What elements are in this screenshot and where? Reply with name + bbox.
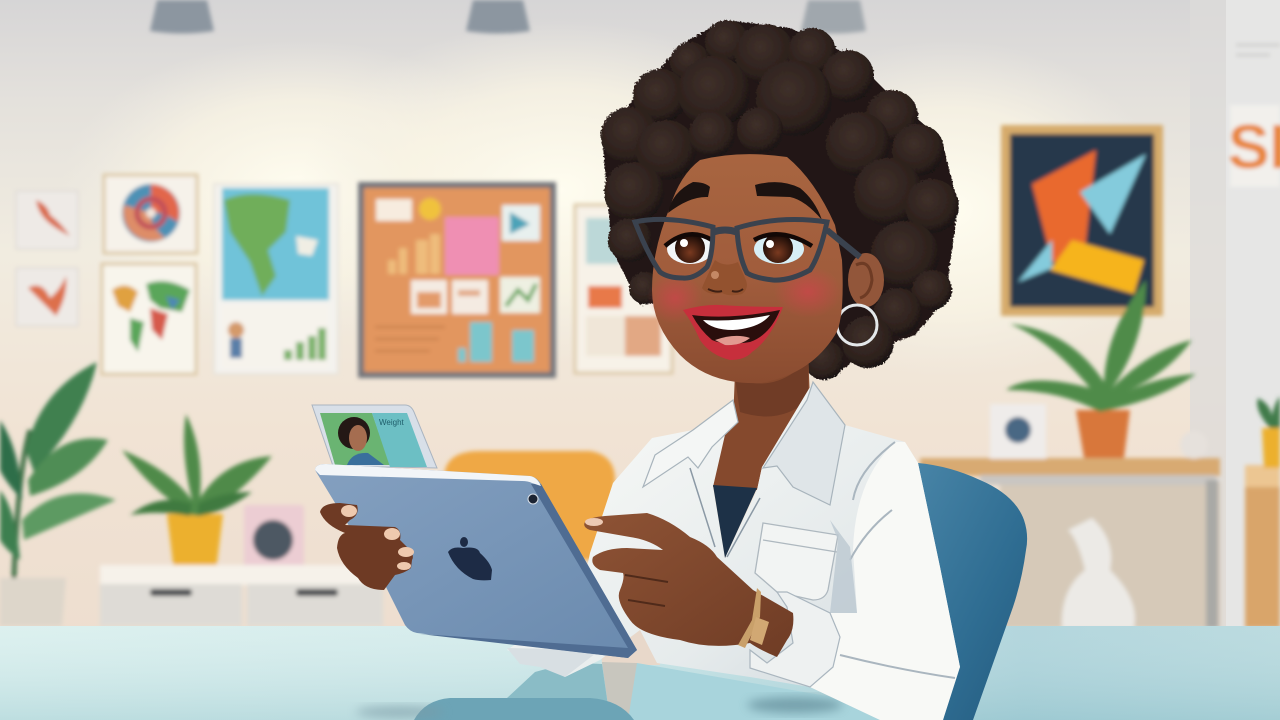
right wooden shelf	[1245, 396, 1280, 628]
upper sleeve highlight	[810, 442, 960, 720]
pocket flap	[763, 540, 837, 552]
right sleeve cuff	[750, 592, 840, 687]
small card behind tablet: Weight	[379, 418, 405, 427]
eyebrow right	[755, 182, 822, 220]
poster: small red marks bottom	[16, 268, 78, 326]
blush right	[774, 266, 842, 318]
ceiling lamps	[150, 0, 866, 34]
earring	[837, 305, 877, 345]
shirt torso	[507, 382, 960, 720]
potted plant on console	[1006, 280, 1196, 458]
small vase	[1180, 431, 1208, 459]
tablet	[315, 464, 637, 658]
eyebrow left	[668, 182, 710, 213]
navy undershirt	[713, 485, 757, 558]
watch	[738, 588, 769, 648]
tablet camera	[528, 494, 538, 504]
nose	[702, 260, 747, 295]
neck shadow	[735, 360, 808, 416]
left white cabinet	[100, 565, 390, 626]
pocket	[755, 523, 838, 600]
shadow at shirt side	[830, 520, 857, 613]
ear	[848, 253, 884, 307]
neck	[712, 352, 810, 490]
eye left	[665, 233, 713, 264]
eye right	[754, 233, 812, 264]
face	[652, 154, 843, 383]
person	[507, 20, 960, 720]
poster: spiral	[104, 175, 197, 253]
poster: orange dashboard board	[361, 185, 553, 375]
hair	[601, 20, 959, 380]
white speaker box	[990, 404, 1046, 459]
poster: small red marks top	[16, 191, 78, 249]
office chair	[900, 463, 1027, 720]
orange chair behind	[445, 451, 615, 560]
left hand	[320, 503, 414, 590]
blush left	[647, 272, 703, 324]
collar right	[763, 382, 845, 505]
sleeve under tablet	[507, 648, 600, 677]
shirt placket lines	[690, 468, 760, 557]
left large plant	[0, 362, 116, 626]
sign: orange letters on right wall	[1228, 44, 1280, 187]
poster: large map	[214, 184, 338, 374]
small card behind tablet	[312, 405, 437, 468]
table	[0, 626, 1280, 720]
poster: partially hidden chart	[575, 205, 672, 373]
collar left	[643, 400, 738, 487]
poster: world map small	[102, 264, 196, 374]
icon: apple logo	[448, 537, 492, 580]
table reflection	[356, 625, 920, 720]
finger gaps	[625, 575, 668, 606]
small clock frame	[244, 505, 304, 573]
sleeve crease	[840, 442, 955, 678]
glasses	[635, 219, 860, 280]
wooden console right	[920, 458, 1220, 628]
mouth	[683, 305, 783, 360]
poster: abstract geometric	[1001, 125, 1163, 316]
fingernails	[341, 505, 414, 570]
right hand	[584, 513, 793, 657]
fingernail	[585, 518, 603, 526]
medium plant in yellow pot	[122, 414, 272, 571]
